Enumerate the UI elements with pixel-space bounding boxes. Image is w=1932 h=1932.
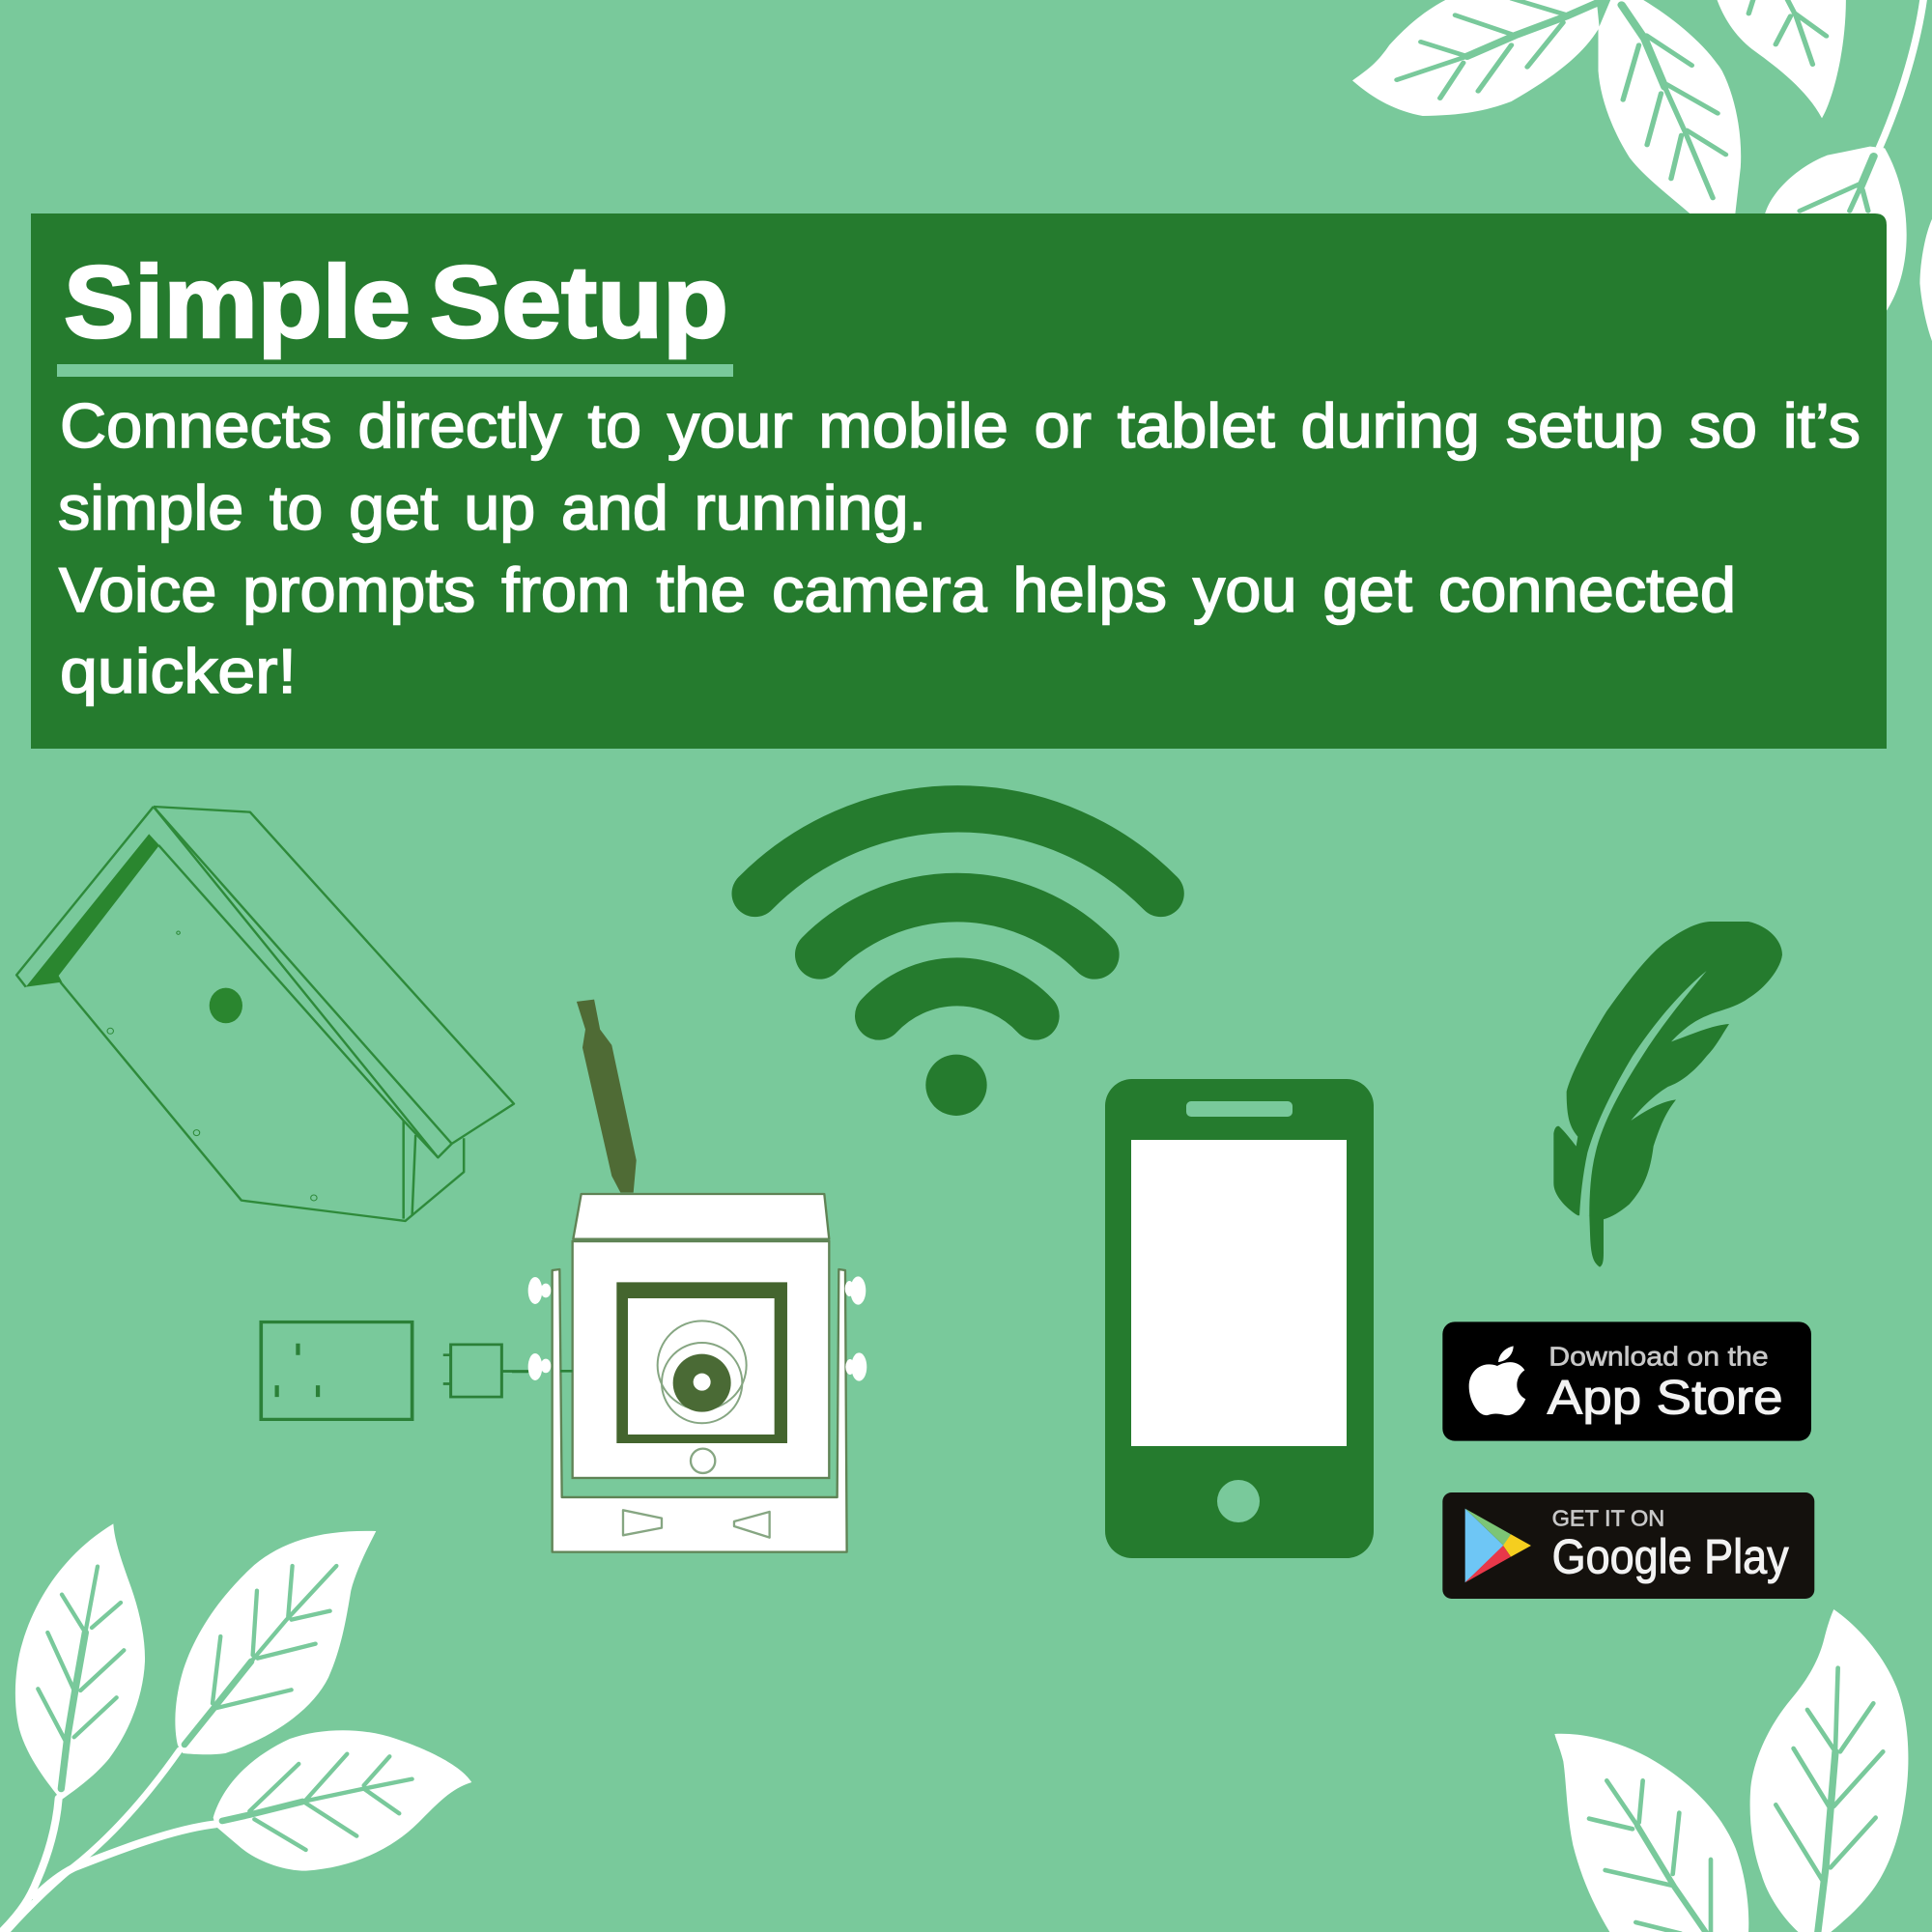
icon: feather	[1553, 922, 1782, 1267]
icon: wifi signal	[755, 809, 1161, 1116]
body text: simple to get up and running.	[58, 472, 926, 543]
body text	[58, 390, 1861, 706]
camera body	[573, 1241, 829, 1478]
body text: Connects directly to your mobile or tablet during setup so it’s	[60, 390, 1861, 461]
lens frame	[616, 1282, 787, 1443]
leaf cluster: bottom right	[1554, 1609, 1908, 1932]
badge: App Store: App Store	[1548, 1370, 1783, 1424]
icon: smartphone	[1105, 1079, 1374, 1558]
title	[64, 245, 728, 359]
body text: Voice prompts from the camera helps you get connected	[59, 554, 1736, 625]
camera hood	[573, 1194, 829, 1239]
title: Setup	[430, 245, 728, 359]
icon: wall socket	[261, 1322, 412, 1419]
icon: plug and cable	[443, 1345, 529, 1397]
badge: Google Play	[1442, 1492, 1814, 1599]
icon: camera antenna	[577, 1000, 637, 1193]
header panel	[31, 213, 1887, 749]
camera stand	[553, 1269, 847, 1552]
badge: App Store: Download on the	[1548, 1341, 1769, 1371]
icon: apple logo	[1469, 1346, 1525, 1415]
leaf cluster: top right	[1352, 0, 1932, 341]
icon: camera	[512, 1194, 867, 1552]
lens	[658, 1321, 747, 1423]
badge: App Store	[1442, 1321, 1811, 1441]
icon: bird box	[16, 807, 514, 1221]
title: Simple	[64, 245, 411, 359]
title underline	[57, 364, 733, 377]
icon: play triangle	[1465, 1509, 1531, 1582]
bracket knobs	[528, 1276, 867, 1381]
badge: Google Play: Google Play	[1552, 1529, 1789, 1583]
body text: quicker!	[60, 636, 297, 706]
leaf cluster: bottom left	[0, 1523, 471, 1932]
badge: Google Play: GET IT ON	[1552, 1505, 1664, 1530]
camera button and arrows	[623, 1449, 770, 1538]
